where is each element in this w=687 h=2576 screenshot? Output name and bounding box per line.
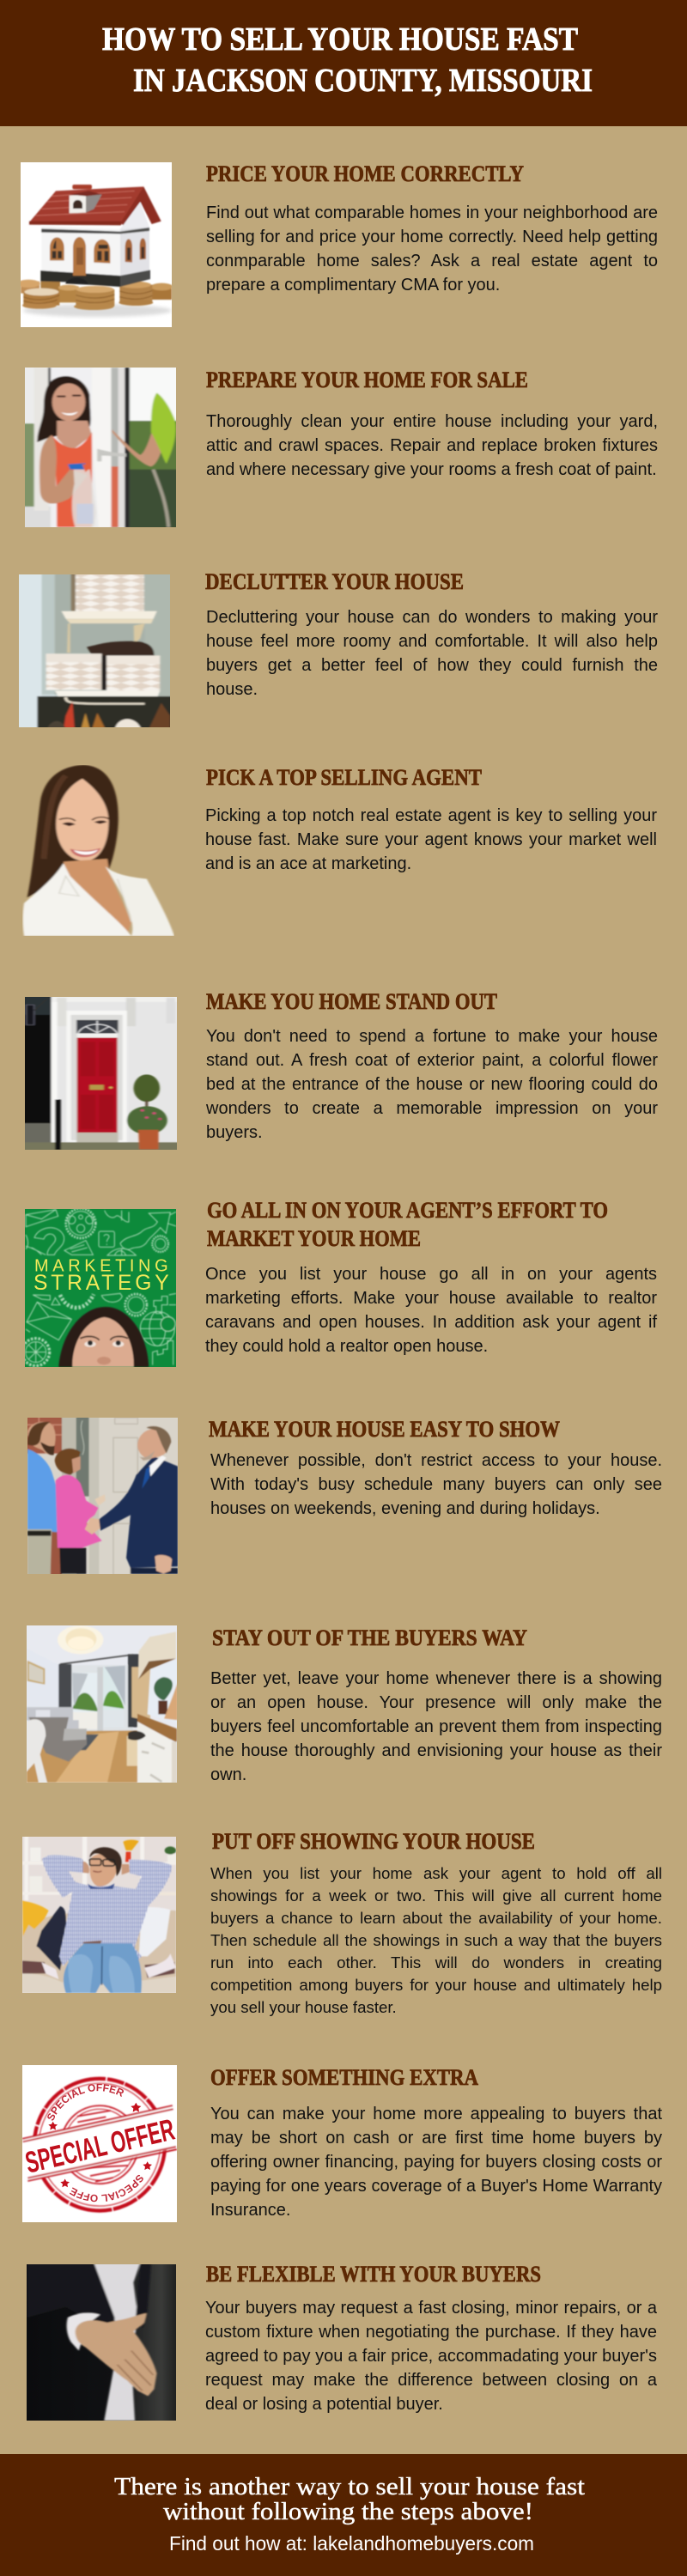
body text	[210, 1451, 662, 1518]
body text: buyers.	[206, 1123, 263, 1142]
header band	[0, 0, 687, 126]
body text: Insurance.	[210, 2201, 290, 2220]
body text: prepare a complimentary CMA for you.	[206, 276, 500, 295]
heading: MAKE YOU HOME STAND OUT	[206, 989, 497, 1014]
body text: request may make the difference between closing on a	[205, 2371, 657, 2390]
body text: Whenever possible, don't restrict access to your house.	[210, 1451, 662, 1470]
body text: deal or losing a potential buyer.	[205, 2395, 443, 2414]
heading: MARKET YOUR HOME	[207, 1226, 421, 1251]
image: agent greeting couple at door	[27, 1418, 178, 1574]
body text: You can make your home more appealing to buyers that	[210, 2105, 662, 2123]
call to action text: without following the steps above!	[163, 2498, 533, 2525]
body text: Picking a top notch real estate agent is key to selling your	[205, 806, 657, 825]
image: staged living room	[27, 1625, 177, 1783]
body text: caravans and open houses. In addition ask your agent if	[205, 1313, 657, 1332]
body text: buyers get a better feel of how they could furnish the	[206, 656, 658, 675]
body text	[210, 2102, 662, 2222]
call to action text	[114, 2471, 585, 2557]
image: marketing strategy chalkboard: MARKETING	[34, 1257, 168, 1276]
panel: make your house easy to show	[27, 1417, 662, 1574]
body text: When you list your home ask your agent to hold off all	[210, 1863, 662, 1882]
panel: be flexible with your buyers	[0, 2259, 687, 2424]
body text	[206, 204, 658, 295]
body text	[210, 1669, 662, 1784]
body text: run into each other. This will do wonders in creating	[210, 1953, 662, 1971]
body text: or an open house. Your presence will only make the	[210, 1693, 662, 1712]
body text: buyers feel uncomfortable an prevent them from inspecting	[210, 1717, 662, 1736]
body text: house feel more roomy and comfortable. It will also help	[206, 632, 658, 651]
panel: pick a top selling agent	[22, 765, 657, 936]
panel: declutter your house	[19, 569, 658, 727]
image: woman cleaning window	[25, 368, 176, 527]
body text: bed at the entrance of the house or new flooring could do	[206, 1075, 658, 1094]
image: special offer stamp: SPECIAL OFFER	[47, 2083, 124, 2121]
body text: Then schedule all the showings in such a way that the buyers	[210, 1930, 662, 1949]
body text: Find out what comparable homes in your neighborhood are	[206, 204, 658, 222]
body text: wonders to create a memorable impression on your	[206, 1099, 658, 1118]
image: marketing strategy chalkboard	[25, 1209, 176, 1367]
image: businessman offering handshake	[27, 2264, 176, 2421]
panel: offer something extra	[22, 2065, 662, 2222]
image: relaxed man on sofa	[22, 1837, 176, 1993]
body text: Better yet, leave your home whenever there is a showing	[210, 1669, 662, 1688]
body text: and is an ace at marketing.	[205, 854, 411, 873]
heading: OFFER SOMETHING EXTRA	[210, 2065, 478, 2090]
panel: put off showing your house	[22, 1829, 662, 2016]
body text	[206, 608, 658, 699]
body text	[205, 806, 657, 873]
title	[102, 21, 593, 99]
heading: GO ALL IN ON YOUR AGENT’S EFFORT TO	[207, 1198, 608, 1223]
body text: house.	[206, 680, 258, 699]
body text: With today's busy schedule many buyers can only see	[210, 1475, 662, 1494]
panel: make you home stand out	[25, 989, 658, 1150]
body text: houses on weekends, evening and during holidays.	[210, 1499, 600, 1518]
body text: showings for a week or two. This will give all current home	[210, 1886, 662, 1905]
footer band	[0, 2454, 687, 2576]
body text: Thoroughly clean your entire house including your yard,	[206, 412, 658, 431]
body text: house fast. Make sure your agent knows your market well	[205, 830, 657, 849]
body text: agreed to pay you a fair price, accommadating your buyer's	[205, 2347, 657, 2366]
call to action text: Find out how at: lakelandhomebuyers.com	[169, 2532, 534, 2555]
body text: marketing efforts. Make your house available to realtor	[205, 1289, 657, 1308]
image: smiling real estate agent	[22, 765, 174, 936]
body text: paying for one years coverage of a Buyer's Home Warranty	[210, 2177, 662, 2196]
body text: custom fixture when negotiating the purchase. If they have	[205, 2323, 657, 2342]
image: organised closet	[19, 574, 170, 727]
call to action text: There is another way to sell your house fast	[114, 2473, 585, 2500]
title: IN JACKSON COUNTY, MISSOURI	[133, 63, 593, 99]
body text	[205, 1265, 658, 1356]
body text: attic and crawl spaces. Repair and replace broken fixtures	[206, 436, 658, 455]
body text	[210, 1863, 662, 2016]
heading: DECLUTTER YOUR HOUSE	[205, 569, 464, 594]
body text	[206, 412, 658, 479]
body text	[205, 2296, 657, 2416]
body text: buyers a chance to learn about the availability of your home.	[210, 1908, 662, 1927]
body text: the house thoroughly and envisioning your house as their	[210, 1741, 662, 1760]
body text: competition among buyers for your house and ultimately help	[210, 1975, 662, 1994]
heading	[207, 1198, 608, 1251]
heading: PICK A TOP SELLING AGENT	[206, 765, 482, 790]
heading: PRICE YOUR HOME CORRECTLY	[206, 161, 524, 186]
body text: offering owner financing, paying for buyers closing costs or	[210, 2153, 662, 2172]
heading: PUT OFF SHOWING YOUR HOUSE	[212, 1829, 535, 1854]
heading: PREPARE YOUR HOME FOR SALE	[206, 368, 528, 392]
body text: You don't need to spend a fortune to make your house	[206, 1027, 658, 1046]
body text: own.	[210, 1765, 246, 1784]
image: special offer stamp	[22, 2065, 177, 2222]
panel: stay out of the buyers way	[27, 1625, 662, 1784]
body text: conmparable home sales? Ask a real estate agent to	[206, 252, 658, 270]
body text: you sell your house faster.	[210, 1997, 397, 2016]
panel: prepare your home for sale	[25, 368, 658, 527]
image: model house on coins	[21, 162, 172, 327]
image: red front door	[25, 997, 177, 1150]
body text: Decluttering your house can do wonders to making your	[206, 608, 658, 627]
title: HOW TO SELL YOUR HOUSE FAST	[102, 21, 578, 58]
heading: MAKE YOUR HOUSE EASY TO SHOW	[209, 1417, 560, 1442]
body text: they could hold a realtor open house.	[205, 1337, 488, 1356]
body text: Your buyers may request a fast closing, minor repairs, or a	[205, 2299, 657, 2318]
body text	[206, 1027, 658, 1142]
heading: BE FLEXIBLE WITH YOUR BUYERS	[206, 2262, 541, 2287]
body text: Once you list your house go all in on your agents	[205, 1265, 657, 1284]
body text: and where necessary give your rooms a fresh coat of paint.	[206, 460, 657, 479]
body text: stand out. A fresh coat of exterior paint, a colorful flower	[206, 1051, 658, 1070]
image: marketing strategy chalkboard: STRATEGY	[33, 1272, 169, 1295]
panel: price your home correctly	[21, 161, 658, 327]
panel: go all in on your agent's effort	[25, 1198, 658, 1367]
body text: may be short on cash or are first time home buyers by	[210, 2129, 662, 2148]
body text: selling for and price your home correctly. Need help getting	[206, 228, 658, 246]
heading: STAY OUT OF THE BUYERS WAY	[212, 1625, 527, 1650]
